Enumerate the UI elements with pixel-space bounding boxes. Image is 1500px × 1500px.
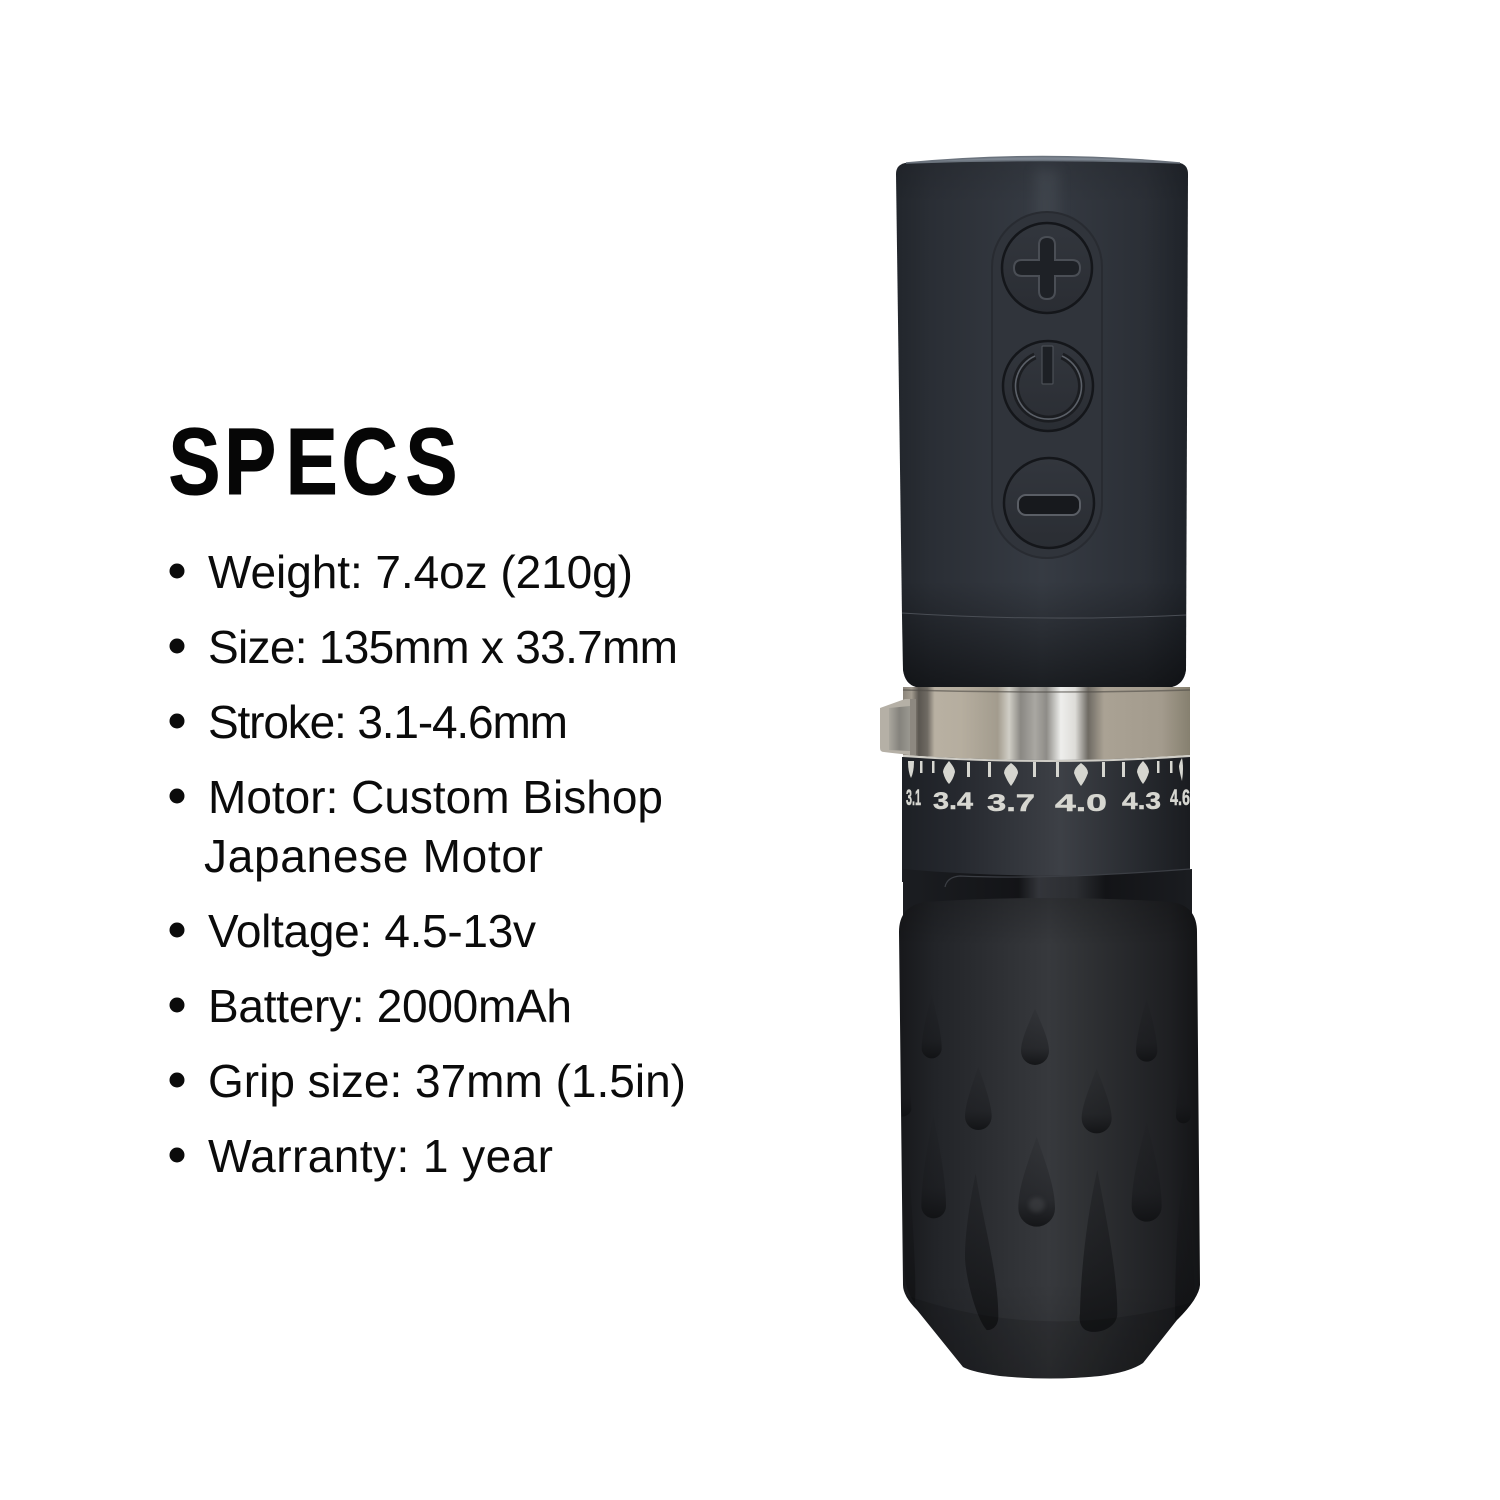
- spec: motor: Motor: Custom Bishop: [208, 771, 663, 823]
- grip teardrop pattern: [902, 1026, 1195, 1378]
- ring clip tab: [880, 699, 916, 755]
- grip chamfer shading: [906, 1296, 1178, 1378]
- spec: voltage: Voltage: 4.5-13v: [208, 905, 536, 957]
- spec: motor: Japanese Motor: [204, 830, 543, 882]
- stroke scale numbers: 4.0: [1055, 790, 1107, 817]
- spec: motor: [170, 771, 663, 882]
- spec list: [170, 546, 686, 1182]
- metal ring: [880, 687, 1190, 761]
- heading: specs: SPECS: [168, 409, 457, 515]
- spec: stroke: Stroke: 3.1-4.6mm: [208, 696, 568, 748]
- dial groove collar: [903, 869, 1192, 915]
- spec: grip size: Grip size: 37mm (1.5in): [208, 1055, 686, 1107]
- upper body: [896, 156, 1188, 687]
- top cap rim: [906, 156, 1180, 163]
- plus button: [1002, 223, 1092, 313]
- pen grip: [899, 898, 1200, 1385]
- tattoo pen machine: [880, 156, 1200, 1385]
- stroke scale ticks: [908, 758, 1183, 786]
- spec: weight: Weight: 7.4oz (210g): [208, 546, 633, 598]
- stroke scale numbers: 3.7: [987, 790, 1035, 817]
- stroke scale numbers: 3.1: [906, 785, 921, 810]
- power button: [1003, 341, 1093, 431]
- upper body highlight: [1035, 170, 1059, 225]
- stroke scale numbers: 3.4: [933, 788, 974, 815]
- spec: battery: Battery: 2000mAh: [208, 980, 572, 1032]
- spec: warranty: Warranty: 1 year: [208, 1130, 553, 1182]
- adjustment dial section: [902, 757, 1192, 915]
- button panel: [992, 212, 1102, 558]
- stroke scale numbers: [906, 785, 1190, 817]
- stroke scale numbers: 4.6: [1170, 785, 1190, 810]
- stroke scale numbers: 4.3: [1122, 788, 1161, 815]
- minus button: [1004, 458, 1094, 548]
- lower body seam: [902, 613, 1186, 618]
- spec: size: Size: 135mm x 33.7mm: [208, 621, 678, 673]
